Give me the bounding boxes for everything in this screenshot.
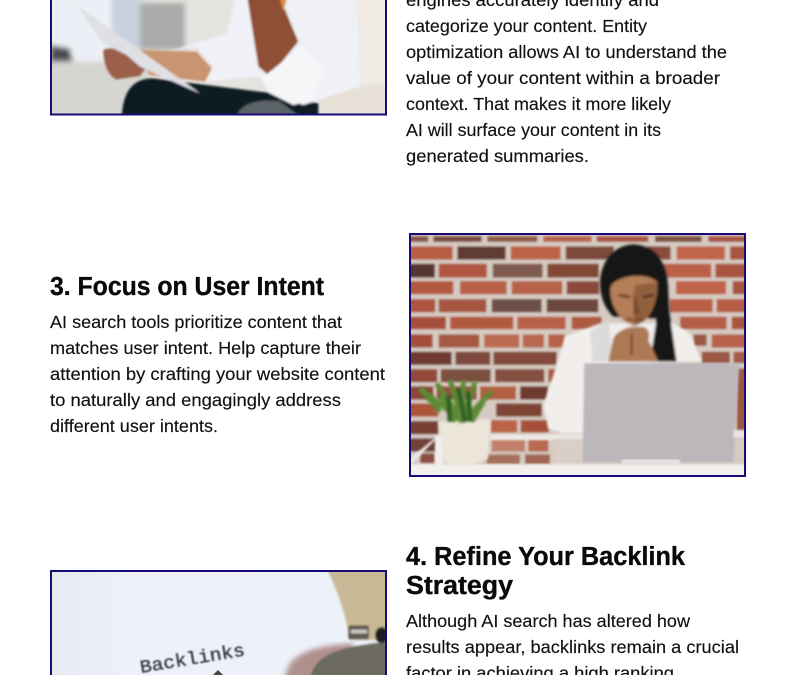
text block: entity optimization paragraph: optimization allows AI to understand the bbox=[406, 42, 727, 62]
text block: user intent paragraph: AI search tools prioritize content that bbox=[50, 312, 342, 332]
hair bbox=[600, 244, 677, 362]
text block: entity optimization paragraph: value of your content within a broader bbox=[406, 68, 720, 88]
heading: 4. Refine Your Backlink Strategy: 4. Refine Your Backlink bbox=[406, 543, 686, 571]
text block: user intent paragraph: matches user intent. Help capture their bbox=[50, 338, 361, 358]
plant bbox=[420, 380, 492, 422]
heading: 3. Focus on User Intent: 3. Focus on User Intent bbox=[50, 273, 324, 301]
photo: woman at laptop in front of brick wall bbox=[403, 228, 750, 482]
text block: user intent paragraph: attention by crafting your website content bbox=[50, 364, 385, 384]
photo: person reading a document on a sofa bbox=[47, 0, 390, 118]
laptop bbox=[583, 363, 739, 462]
text block: entity optimization paragraph: categorize your content. Entity bbox=[406, 16, 647, 36]
heading: 4. Refine Your Backlink Strategy bbox=[406, 543, 686, 600]
text block: backlink paragraph bbox=[406, 611, 739, 675]
text block: entity optimization paragraph: AI will surface your content in its bbox=[406, 120, 661, 140]
shirt bbox=[543, 323, 702, 433]
text block: backlink paragraph: Although AI search has altered how bbox=[406, 611, 690, 631]
photo: typewriter page reading Backlinks bbox=[51, 567, 390, 675]
plant pot bbox=[438, 419, 491, 465]
text block: entity optimization paragraph bbox=[406, 0, 727, 166]
text block: user intent paragraph bbox=[50, 312, 385, 436]
text block: entity optimization paragraph: context. That makes it more likely bbox=[406, 94, 671, 114]
hands bbox=[608, 327, 658, 362]
text block: entity optimization paragraph: generated summaries. bbox=[406, 146, 589, 166]
heading: 4. Refine Your Backlink Strategy: Strategy bbox=[406, 572, 514, 600]
text block: user intent paragraph: to naturally and engagingly address bbox=[50, 390, 341, 410]
face bbox=[610, 276, 657, 326]
text block: backlink paragraph: results appear, backlinks remain a crucial bbox=[406, 637, 739, 657]
text block: user intent paragraph: different user intents. bbox=[50, 416, 218, 436]
table bbox=[411, 418, 744, 475]
